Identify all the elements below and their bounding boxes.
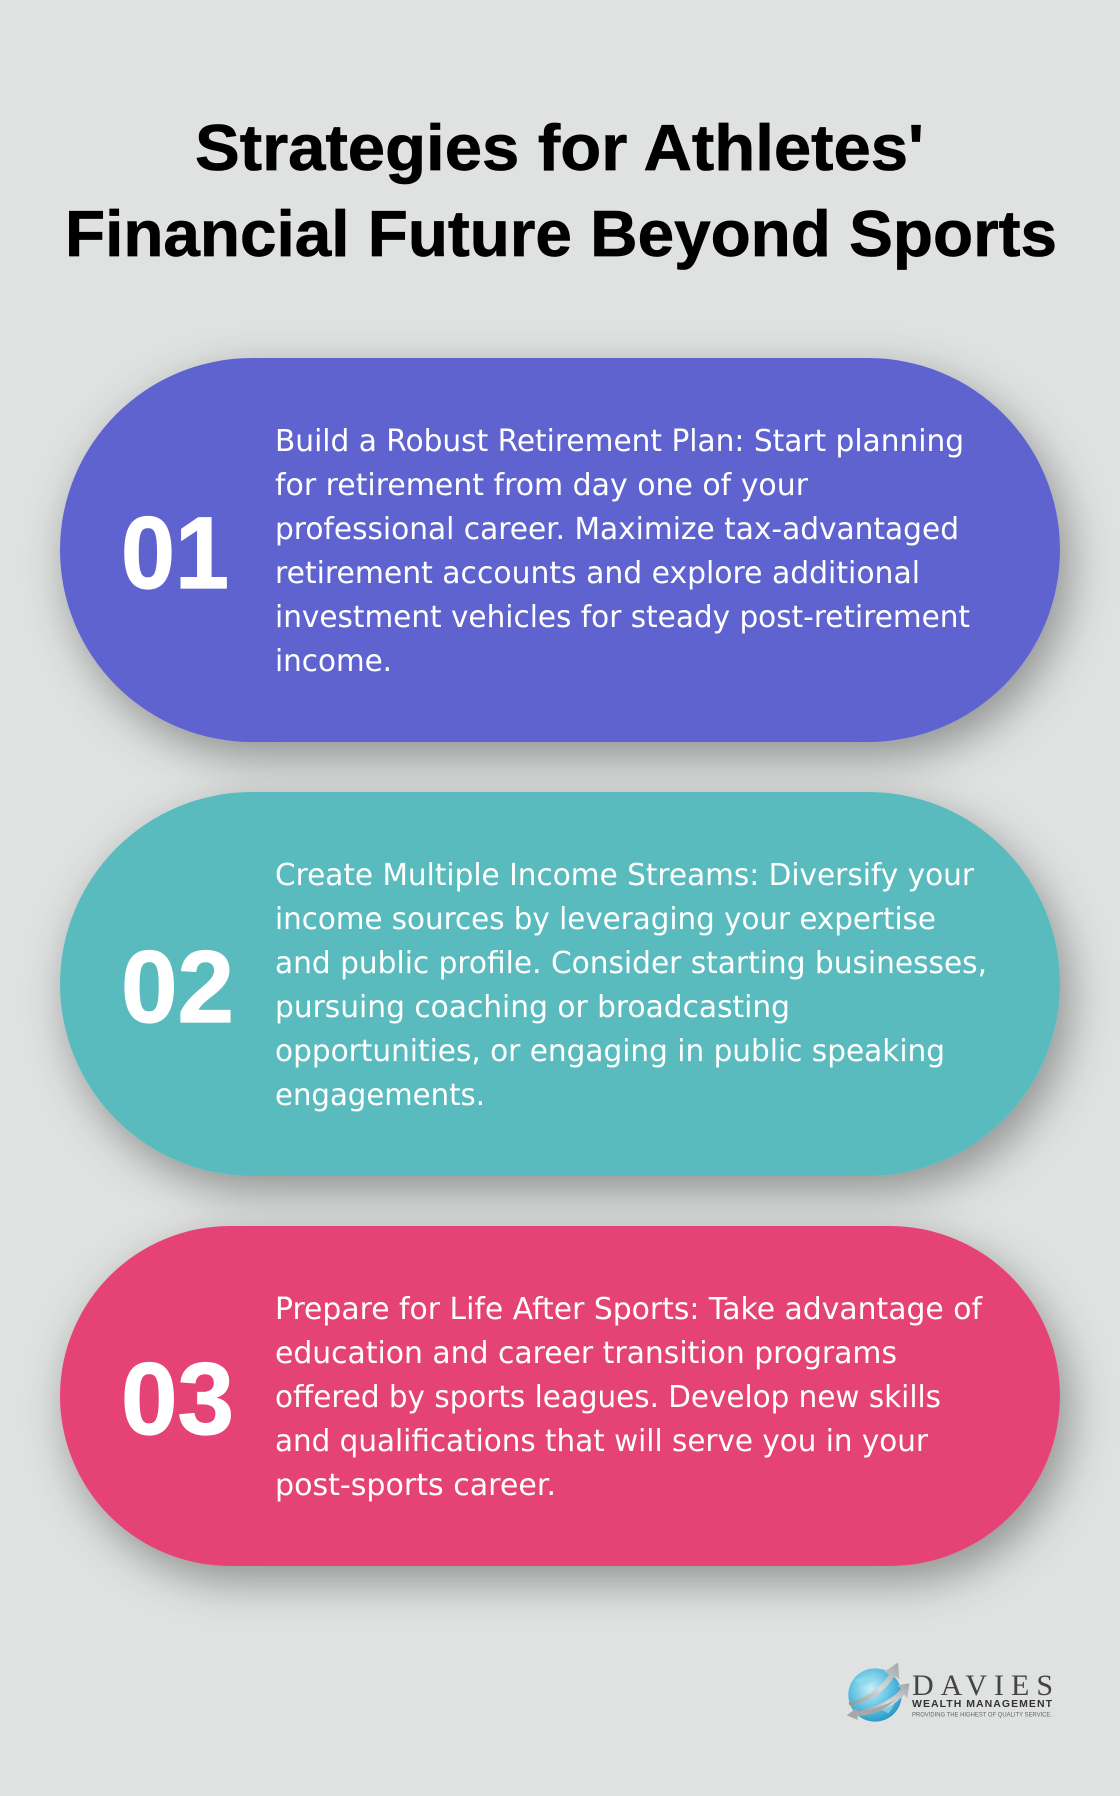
- text block 02: Create Multiple Income Streams: Diversify your: [275, 858, 974, 893]
- wordmark DAVIES: DAVIES: [912, 1669, 1053, 1702]
- text block 01: professional career. Maximize tax-advantaged: [275, 512, 959, 547]
- text block 03: post-sports career.: [275, 1468, 556, 1503]
- text block 03: education and career transition programs: [275, 1336, 897, 1371]
- text block 01: retirement accounts and explore additional: [275, 556, 920, 591]
- pill background 03: [60, 1226, 1060, 1566]
- title: Strategies for Athletes': [195, 111, 924, 184]
- text block 03: and qualifications that will serve you in your: [275, 1424, 928, 1459]
- text block 02: and public profile. Consider starting businesses,: [275, 946, 987, 981]
- text block 01: investment vehicles for steady post-retirement: [275, 600, 970, 635]
- text block 01: income.: [275, 644, 392, 679]
- panel: step 01 retirement plan: [60, 358, 1060, 742]
- title: [65, 111, 1057, 270]
- text block 03: Prepare for Life After Sports: Take advantage of: [275, 1292, 983, 1327]
- text block 01: for retirement from day one of your: [275, 468, 808, 503]
- text block 02: engagements.: [275, 1078, 485, 1113]
- panel: step 02 income streams: [60, 792, 1060, 1176]
- text block 03: [275, 1292, 983, 1503]
- pill background 01: [60, 358, 1060, 742]
- icon: globe with arrows: [847, 1663, 909, 1722]
- text block 02: opportunities, or engaging in public speaking: [275, 1034, 945, 1069]
- number 02: 02: [121, 930, 234, 1044]
- tagline: PROVIDING THE HIGHEST OF QUALITY SERVICE.: [912, 1712, 1052, 1718]
- number 01: 01: [121, 496, 229, 610]
- title: Financial Future Beyond Sports: [65, 197, 1057, 270]
- text block 02: pursuing coaching or broadcasting: [275, 990, 790, 1025]
- text block 02: income sources by leveraging your expertise: [275, 902, 936, 937]
- text block 02: [275, 858, 987, 1113]
- logo: Davies Wealth Management: [847, 1663, 1053, 1722]
- text block 01: [275, 424, 970, 679]
- number 03: 03: [121, 1342, 234, 1456]
- text block 03: offered by sports leagues. Develop new skills: [275, 1380, 941, 1415]
- pill background 02: [60, 792, 1060, 1176]
- wordmark WEALTH MANAGEMENT: WEALTH MANAGEMENT: [912, 1698, 1053, 1710]
- panel: step 03 life after sports: [60, 1226, 1060, 1566]
- text block 01: Build a Robust Retirement Plan: Start planning: [275, 424, 964, 459]
